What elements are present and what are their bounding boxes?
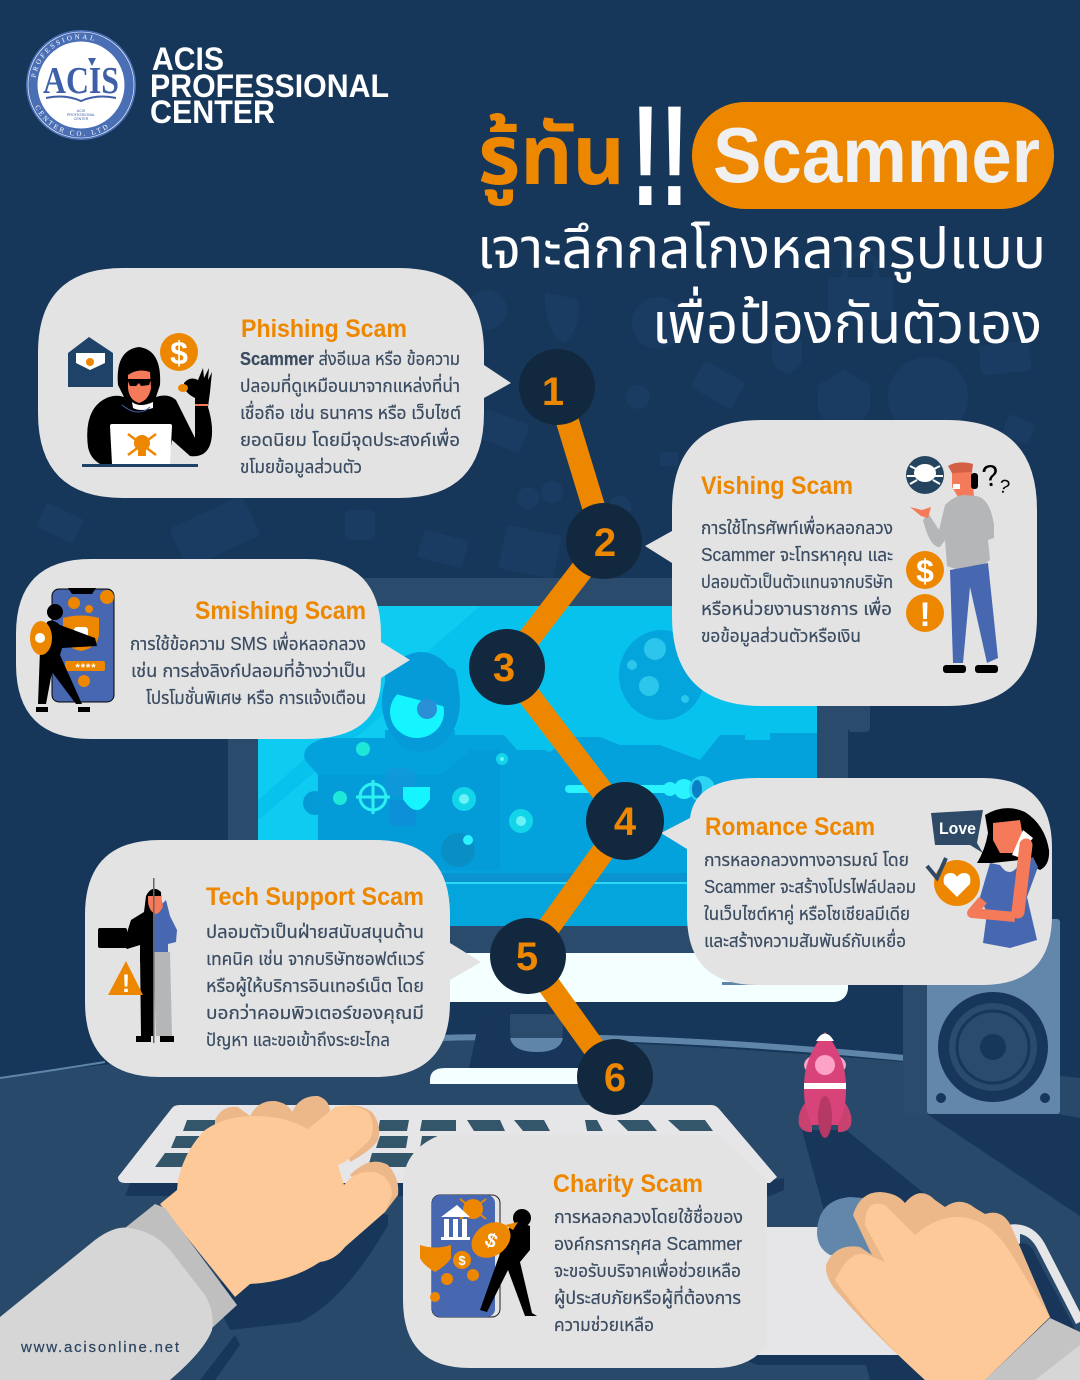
smishing body: เช่น การส่งลิงก์ปลอมที่อ้างว่าเป็น [131,658,366,681]
monitor screen [258,606,817,926]
charity body: ความช่วยเหลือ [554,1315,654,1335]
logo wordmark: CENTER [150,94,275,130]
vishing bubble [645,420,1037,706]
background ghost icons [36,254,1036,579]
vishing body: ขอข้อมูลส่วนตัวหรือเงิน [701,626,861,648]
logo badge [26,30,136,140]
charity body [554,1204,743,1335]
logo badge: ACIS [77,109,86,113]
smishing body: โปรโมชั่นพิเศษ หรือ การแจ้งเตือน [146,686,366,708]
step 4 [586,782,664,860]
logo badge: CENTER [74,117,89,121]
step 1 [519,349,595,425]
title line 1 [478,77,1054,236]
tech support bubble [85,840,481,1077]
monitor stand [469,1002,600,1068]
title line 1: รู้ทัน [478,108,625,206]
step 4: 4 [614,800,637,844]
left hand shadow [200,1200,388,1380]
rocket shadow [802,1130,1000,1380]
speaker [903,919,1060,1115]
title line 3: เพื่อป้องกันตัวเอง [652,286,1042,355]
step 6: 6 [604,1056,626,1100]
romance body: และสร้างความสัมพันธ์กับเหยื่อ [704,928,906,951]
keyboard [118,1105,784,1196]
smishing body: การใช้ข้อความ SMS เพื่อหลอกลวง [130,631,366,654]
right hand [826,1192,1080,1380]
logo wordmark [150,41,389,130]
romance bubble [661,778,1052,985]
step 5: 5 [516,935,538,979]
phishing bubble [38,268,511,498]
step 3 [469,629,545,705]
title line 1: !! [631,77,689,236]
left sleeve [0,1204,237,1380]
tech support body: ปลอมตัวเป็นฝ่ายสนับสนุนด้าน [206,922,424,943]
smishing body [130,631,366,708]
romance illustration [927,808,1049,948]
logo badge: CENTER CO. LTD [36,106,108,136]
vishing illustration: $ [916,553,934,589]
tech support body: หรือผู้ให้บริการอินเทอร์เน็ต โดย [206,976,424,998]
left hand [0,1096,398,1380]
scam timeline connector [507,387,625,1077]
romance body: ในเว็บไซต์หาคู่ หรือโซเชียลมีเดีย [704,904,910,926]
tech support body: เทคนิค เช่น จากบริษัทซอฟต์แวร์ [206,949,425,969]
step 2: 2 [594,521,616,565]
logo badge: ACIS [43,60,119,102]
logo badge: PROFESSIONAL [31,34,94,78]
romance title: Romance Scam [705,813,875,841]
vishing illustration: ? [997,476,1012,499]
charity title: Charity Scam [553,1170,703,1198]
tech support body: ปัญหา และขอเข้าถึงระยะไกล [206,1030,390,1050]
charity body: ผู้ประสบภัยหรือผู้ที่ต้องการ [554,1285,741,1310]
speaker shadow [927,1114,1080,1216]
phishing body: เชื่อถือ เช่น ธนาคาร หรือ เว็บไซต์ [240,400,461,423]
smishing title: Smishing Scam [195,597,366,625]
step 3: 3 [493,646,515,690]
phishing body: ยอดนิยม โดยมีจุดประสงค์เพื่อ [240,427,460,451]
charity illustration [420,1195,537,1317]
step 5 [490,918,566,994]
website: www.acisonline.net [20,1339,180,1356]
title line 2: เจาะลึกกลโกงหลากรูปแบบ [477,217,1046,283]
computer mouse [817,1197,900,1260]
tech support illustration [98,878,177,1043]
title pill [692,102,1054,209]
vishing body: การใช้โทรศัพท์เพื่อหลอกลวง [701,515,893,538]
step 2 [566,503,642,579]
rocket [799,1032,851,1138]
charity illustration: $ [458,1253,466,1268]
charity bubble [403,1135,767,1368]
phishing illustration: $ [170,335,188,371]
tech support body [206,922,425,1050]
romance body: Scammer จะสร้างโปรไฟล์ปลอม [704,877,916,897]
phishing body [240,349,461,479]
charity body: การหลอกลวงโดยใช้ชื่อของ [554,1204,743,1227]
charity body: จะขอรับบริจาคเพื่อช่วยเหลือ [554,1258,741,1281]
smishing illustration: **** [75,662,97,674]
phishing body: ขโมยข้อมูลส่วนตัว [240,457,362,479]
romance illustration: Love [939,819,976,838]
mouse pad with cable [740,1227,1080,1380]
phishing illustration [68,333,212,467]
smishing illustration [30,588,114,712]
vishing illustration: ? [980,459,1001,494]
charity body: องค์กรการกุศล Scammer [554,1234,742,1255]
phishing title: Phishing Scam [241,315,407,343]
romance body: การหลอกลวงทางอารมณ์ โดย [704,850,909,870]
logo wordmark: ACIS [152,41,224,77]
tech support body: บอกว่าคอมพิวเตอร์ของคุณมี [206,1003,424,1024]
tech support title: Tech Support Scam [206,883,424,911]
phishing body: Scammer ส่งอีเมล หรือ ข้อความ [240,349,460,369]
monitor [228,578,870,1084]
tech support illustration: ! [122,970,130,998]
step 1: 1 [542,370,564,414]
logo badge: PROFESSIONAL [67,113,95,117]
vishing title: Vishing Scam [701,472,853,500]
title line 1: Scammer [713,111,1040,199]
step 6 [577,1039,653,1115]
phishing body: ปลอมที่ดูเหมือนมาจากแหล่งที่น่า [240,373,460,398]
vishing body: Scammer จะโทรหาคุณ และ [701,545,893,566]
monitor bezel [435,953,848,1002]
vishing body: หรือหน่วยงานราชการ เพื่อ [701,596,892,619]
logo wordmark: PROFESSIONAL [150,68,389,104]
desk surface [0,1039,1080,1380]
vishing illustration: ! [919,596,931,634]
smishing bubble [16,559,410,739]
vishing illustration [906,456,1012,673]
romance body [704,850,916,951]
charity illustration: $ [481,1229,501,1253]
vishing body: ปลอมตัวเป็นตัวแทนจากบริษัท [701,572,893,592]
vishing body [701,515,893,648]
